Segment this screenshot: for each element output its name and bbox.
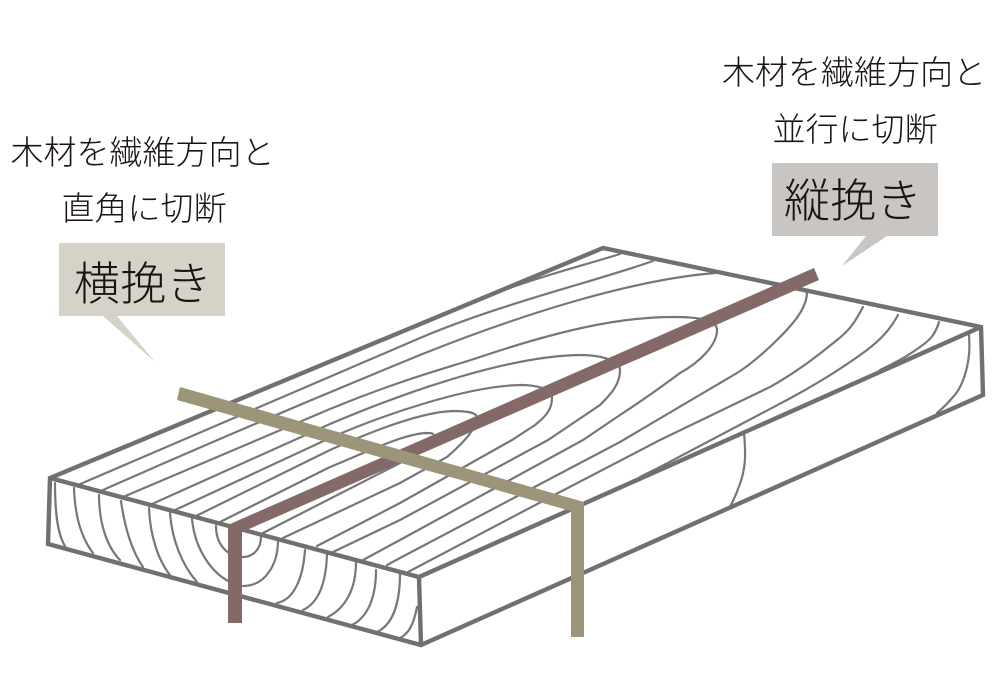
board outline <box>48 248 983 645</box>
right caption: rip cut description: 並行に切断 <box>772 111 938 148</box>
front end grain rings <box>55 483 417 638</box>
board faces background <box>48 248 983 645</box>
callout: crosscut label <box>59 243 225 362</box>
right caption: rip cut description: 木材を繊維方向と <box>722 54 986 91</box>
callout: rip cut label: 縦挽き <box>784 175 922 227</box>
left caption: crosscut description <box>10 134 274 227</box>
wood board <box>48 248 983 645</box>
rip cut line <box>228 268 819 623</box>
callout: crosscut label: 横挽き <box>74 258 212 310</box>
callout: rip cut label <box>772 163 938 266</box>
top face grain lines <box>78 254 969 572</box>
right caption: rip cut description <box>722 54 986 148</box>
crosscut line <box>177 387 584 637</box>
left caption: crosscut description: 木材を繊維方向と <box>10 134 274 171</box>
left caption: crosscut description: 直角に切断 <box>62 190 226 227</box>
